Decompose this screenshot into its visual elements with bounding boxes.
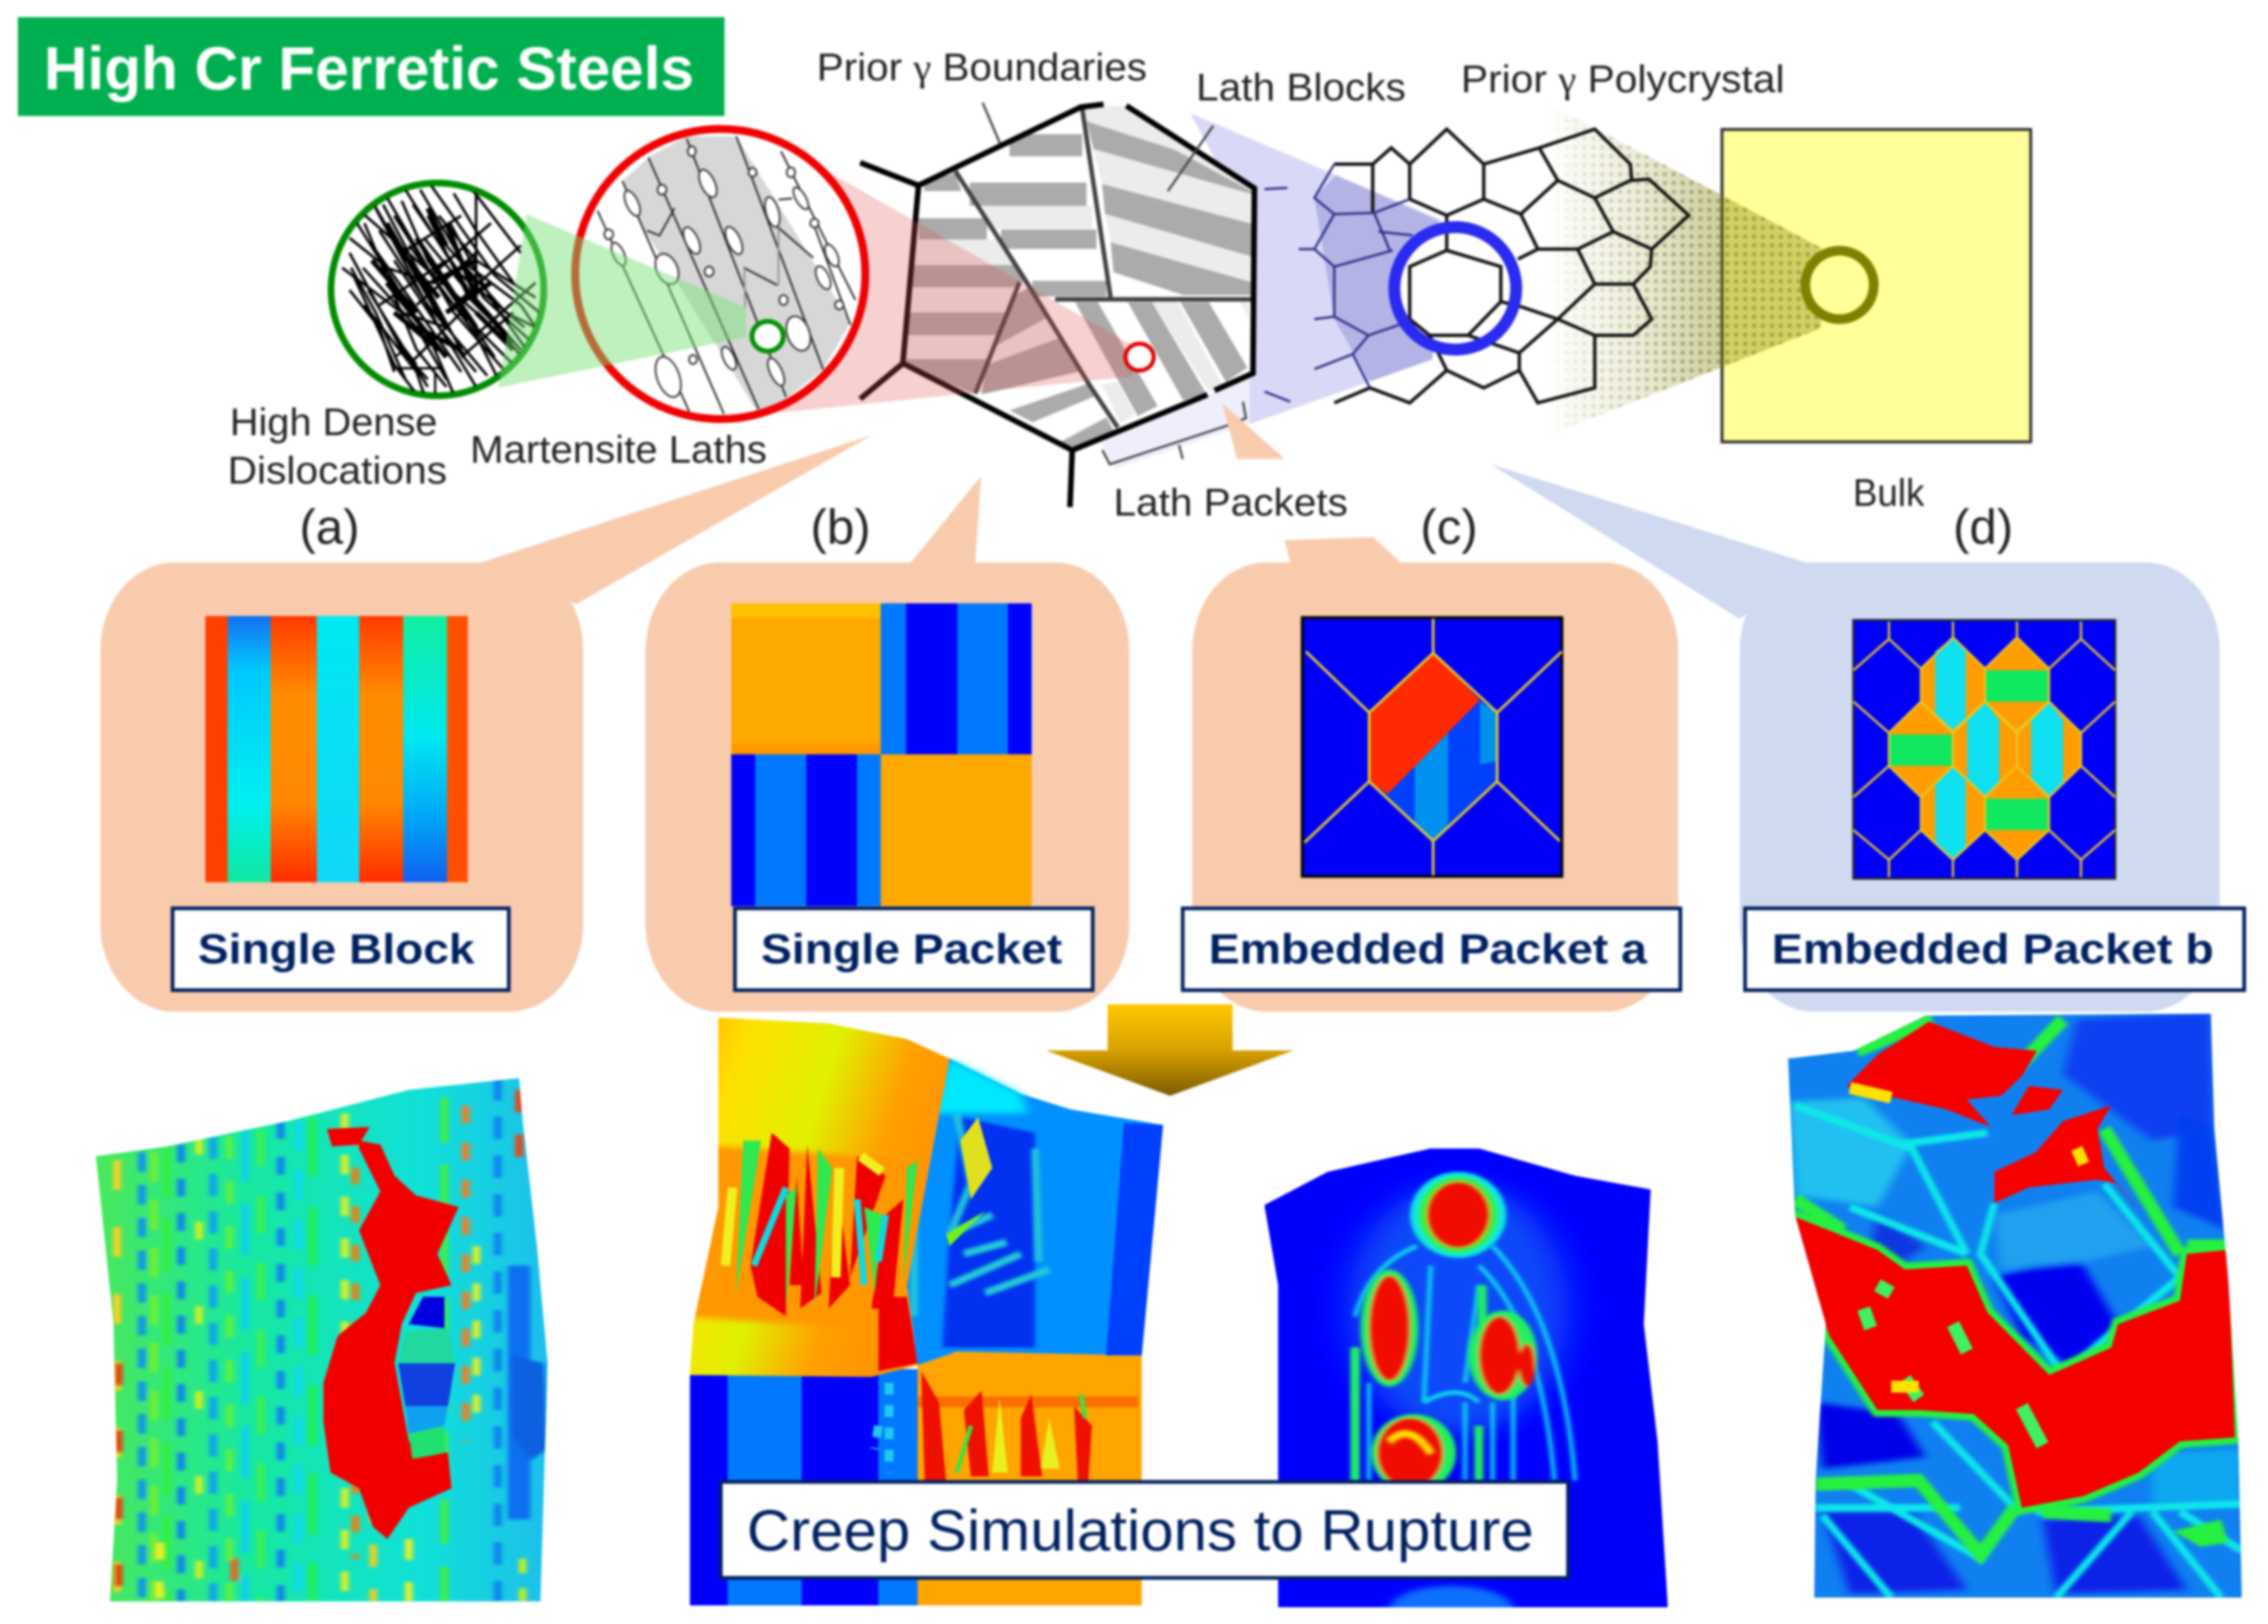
- grain boundaries: [956, 109, 1254, 428]
- bottom left packet: [690, 1369, 919, 1605]
- panel d label: [1745, 908, 2244, 990]
- panel b label: [735, 908, 1093, 990]
- label: high dense dislocations: High Dense: [230, 401, 437, 444]
- label: high dense dislocations: Dislocations: [228, 449, 447, 492]
- small green ring: [752, 321, 783, 351]
- caption: creep simulations to rupture: [721, 1482, 1568, 1578]
- hot spot right: [1468, 1311, 1538, 1400]
- heatmap d: [1854, 620, 2115, 879]
- panel b label: Single Packet: [761, 925, 1062, 973]
- hexagon: prior gamma grain with lath blocks: [860, 104, 1254, 507]
- panel c: embedded packet a: [1183, 403, 1680, 1012]
- label: lath packets: Lath Packets: [1114, 481, 1348, 524]
- simulation c: embedded packet a: [1259, 1144, 1671, 1624]
- panel c label: Embedded Packet a: [1209, 925, 1648, 973]
- panel letter a: (a): [300, 499, 359, 554]
- hot spot bottom: [1371, 1414, 1456, 1492]
- title: High Cr Ferretic Steels: [44, 35, 694, 103]
- top left packet: [690, 1018, 950, 1377]
- panel a label: Single Block: [198, 925, 475, 973]
- simulation b: single packet: [679, 1018, 1163, 1605]
- heatmap b: [731, 603, 1032, 906]
- blue ring: [1395, 227, 1516, 350]
- bottom right packet: [918, 1352, 1142, 1605]
- simulation a: single block: [94, 1076, 550, 1604]
- label: bulk: Bulk: [1853, 472, 1925, 515]
- panel a: single block: [100, 435, 872, 1012]
- panel c label: [1183, 908, 1680, 990]
- caption: creep simulations to rupture: Creep Simulations to Rupture: [747, 1498, 1534, 1563]
- panel d label: Embedded Packet b: [1772, 925, 2214, 973]
- small red ring: [1125, 344, 1154, 370]
- bulk ring: [1805, 251, 1874, 319]
- hot spot top: [1410, 1172, 1506, 1258]
- zoom cone: red: [764, 156, 1132, 414]
- panel letter d: (d): [1953, 499, 2013, 554]
- box: bulk: [1722, 129, 2031, 442]
- panel a label: [173, 908, 509, 990]
- arrow: gold down: [1046, 1004, 1294, 1096]
- label: martensite laths: Martensite Laths: [470, 429, 767, 472]
- panel b: single packet: [646, 476, 1129, 1012]
- zoom cone: blue: [1086, 113, 1441, 469]
- label: lath blocks: Lath Blocks: [1196, 66, 1406, 109]
- panel d: embedded packet b: [1491, 464, 2244, 1012]
- label: prior gamma polycrystal: Prior γ Polycrystal: [1461, 58, 1784, 101]
- grain network: [1334, 129, 1689, 403]
- zoom cone: olive: [1547, 103, 1821, 436]
- label: prior gamma boundaries: Prior γ Boundaries: [817, 46, 1147, 89]
- hole stripes: [398, 1297, 455, 1459]
- simulation d: embedded packet b: [1782, 1012, 2249, 1602]
- polycrystal grains: [1265, 129, 1689, 403]
- title: [18, 17, 725, 116]
- hot spot left: [1361, 1269, 1419, 1387]
- circle: martensite laths: [575, 129, 865, 419]
- label: high dense dislocations: [228, 401, 447, 492]
- panel letter c: (c): [1421, 499, 1477, 554]
- leader lines and packet bracket: [983, 103, 1246, 464]
- panel letter b: (b): [811, 499, 870, 554]
- outer prior gamma boundary: [860, 104, 1254, 507]
- rupture zone: [324, 1140, 459, 1539]
- top right packet: [907, 1059, 1163, 1365]
- rupture zones: [1795, 1021, 2235, 1508]
- circle: high dense dislocations: [331, 183, 544, 398]
- heatmap c: [1302, 617, 1562, 876]
- heatmap a: [205, 616, 468, 882]
- zoom cone: green: [498, 214, 746, 388]
